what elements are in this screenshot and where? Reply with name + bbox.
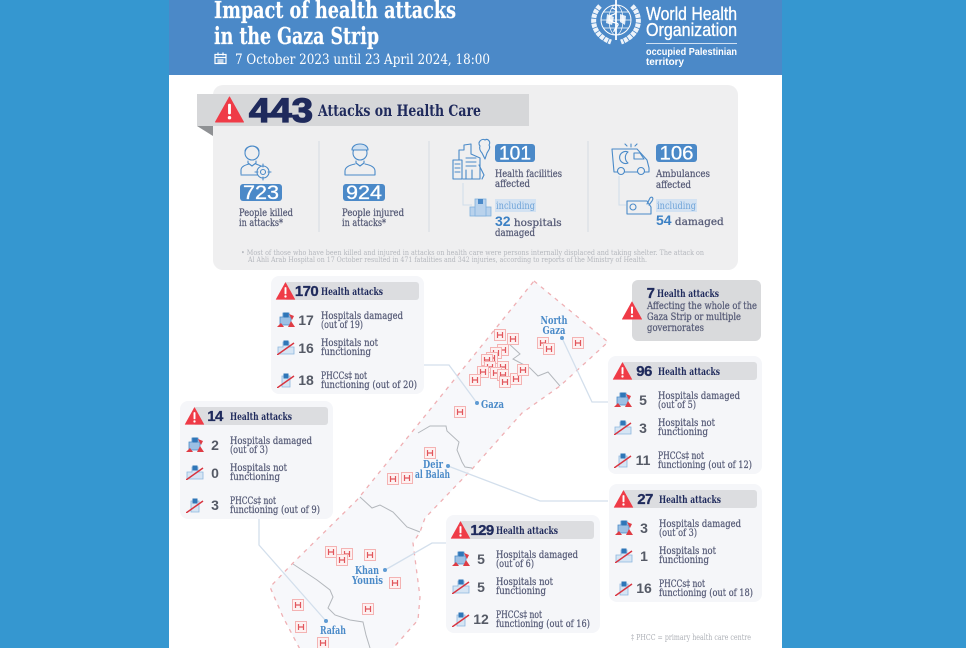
WHO logo: Organization <box>646 20 737 40</box>
stat: people killed <box>239 146 293 229</box>
panel: Rafah governorate: Health attacks <box>230 411 292 423</box>
panel: Rafah governorate: 3 <box>211 497 219 513</box>
panel: Rafah governorate <box>180 401 333 519</box>
panel: North Gaza governorate: 3 <box>639 420 647 436</box>
stat: people injured: in attacks* <box>342 217 387 229</box>
panel: Khan Younis governorate <box>446 515 600 633</box>
stat: health facilities: damaged <box>495 227 535 239</box>
panel: Khan Younis governorate: (out of 6) <box>496 558 534 570</box>
panel: Gaza governorate: functioning (out of 20) <box>321 379 417 391</box>
white page <box>169 0 782 648</box>
footnote: • Most of those who have been killed and injured in attacks on health care were persons internally displaced and taking shelter. The attack on <box>241 248 704 257</box>
icon: warning <box>216 97 243 122</box>
divider line <box>319 141 588 232</box>
WHO logo <box>594 0 737 68</box>
icon: hospital <box>470 199 491 216</box>
panel: Deir al Balah governorate: 27 <box>637 491 653 508</box>
label: Khan Younis <box>351 564 387 587</box>
panel: North Gaza governorate <box>608 356 762 474</box>
callout: 7 health attacks: Gaza Strip or multiple <box>647 311 741 323</box>
panel: Rafah governorate: functioning <box>230 471 280 483</box>
panel: North Gaza governorate: 5 <box>639 392 647 408</box>
panel: Gaza governorate: functioning <box>321 346 371 358</box>
label: People injured <box>342 207 404 219</box>
panel: North Gaza governorate: Hospitals not <box>658 417 716 429</box>
panel: Gaza governorate: (out of 19) <box>321 319 363 331</box>
panel: Rafah governorate: PHCCs‡ not <box>230 495 277 507</box>
panel: North Gaza governorate: Hospitals damaged <box>658 390 740 402</box>
label: Rafah: Rafah <box>320 624 346 637</box>
panel: Gaza governorate: 170 <box>295 283 318 300</box>
badge 723 <box>240 184 282 201</box>
panel: Rafah governorate: 2 <box>211 437 219 453</box>
stat: health facilities: including <box>496 201 535 212</box>
label: Rafah <box>320 619 346 637</box>
panel: Deir al Balah governorate: 1 <box>640 548 648 564</box>
label: Khan Younis: Khan <box>355 564 379 577</box>
header band <box>169 0 782 75</box>
panel: attacks on health care summary <box>197 85 738 270</box>
callout: 7 health attacks: Affecting the whole of the <box>646 300 757 312</box>
WHO logo: territory <box>646 57 684 68</box>
panel: Deir al Balah governorate: 16 <box>636 580 652 596</box>
title <box>214 0 456 50</box>
panel: Khan Younis governorate: PHCCs‡ not <box>496 609 543 621</box>
panel: Rafah governorate: 14 <box>207 408 224 425</box>
callout: 7 health attacks: Health attacks <box>657 288 719 300</box>
panel: Khan Younis governorate: Hospitals not <box>496 576 554 588</box>
stat: health facilities: affected <box>495 178 530 190</box>
panel: Deir al Balah governorate <box>609 484 762 602</box>
label: Gaza <box>475 398 504 411</box>
panel: Deir al Balah governorate: 3 <box>640 520 648 536</box>
panel: North Gaza governorate: Health attacks <box>658 366 720 378</box>
label: Health facilities <box>495 168 562 180</box>
logo wordmark: World Health <box>646 4 737 24</box>
stat: ambulances: 106 <box>660 144 694 164</box>
panel: Khan Younis governorate: functioning <box>496 585 546 597</box>
panel: Rafah governorate: 0 <box>211 465 219 481</box>
hospitals damaged: 32 hospitals <box>495 213 562 229</box>
stat: people killed: 723 <box>243 183 279 204</box>
title: in the Gaza Strip <box>214 23 379 50</box>
stat: health facilities: 101 <box>499 144 531 164</box>
panel: Khan Younis governorate: Health attacks <box>496 525 558 537</box>
panel: Rafah governorate: functioning (out of 9) <box>230 504 320 516</box>
label: People killed <box>239 207 293 219</box>
strip outline <box>270 281 608 648</box>
panel: Gaza governorate: Hospitals not <box>321 337 379 349</box>
icon: person with target <box>241 146 271 180</box>
hospital markers <box>292 330 584 648</box>
panel: Gaza governorate: Health attacks <box>321 286 383 298</box>
panel: North Gaza governorate: 96 <box>636 363 652 380</box>
including highlight <box>495 199 536 212</box>
panel: Deir al Balah governorate: functioning (out of 18) <box>659 587 753 599</box>
ambulances damaged: 54 damaged <box>656 212 724 228</box>
label: Deir al Balah <box>415 458 450 481</box>
panel: Deir al Balah governorate: (out of 3) <box>659 527 697 539</box>
headline label: Attacks on Health Care <box>317 101 481 120</box>
date range: 7 October 2023 until 23 April 2024, 18:00 <box>235 52 490 68</box>
panel: Gaza governorate: PHCCs‡ not <box>321 370 368 382</box>
badge 101 <box>495 144 535 162</box>
footnote <box>241 248 704 264</box>
panel: Khan Younis governorate: 5 <box>477 551 485 567</box>
stat: people injured: 924 <box>346 183 382 204</box>
panel: Deir al Balah governorate: Hospitals damaged <box>659 518 741 530</box>
label: Deir al Balah: al Balah <box>415 468 450 481</box>
icon: injured person <box>345 144 375 175</box>
WHO logo: occupied Palestinian <box>646 47 737 58</box>
panel: Rafah governorate: Hospitals not <box>230 462 288 474</box>
connector <box>619 176 626 205</box>
panel: Gaza governorate: 17 <box>298 312 314 328</box>
icon: WHO emblem <box>594 0 638 42</box>
including highlight <box>656 199 697 212</box>
panel: Gaza governorate: 18 <box>298 372 314 388</box>
callout: 7 health attacks: 7 <box>647 285 655 302</box>
PHCC footnote: ‡ PHCC = primary health care centre <box>631 633 751 642</box>
banner ribbon <box>197 92 529 136</box>
stat: people injured <box>342 144 404 229</box>
callout: 7 health attacks: governorates <box>647 322 704 334</box>
badge 924 <box>343 184 385 201</box>
label: Khan Younis: Younis <box>351 574 383 587</box>
icon: calendar <box>215 52 226 64</box>
panel: Gaza governorate: Hospitals damaged <box>321 310 403 322</box>
connector <box>463 183 472 205</box>
map: Gaza Strip <box>259 281 608 648</box>
panel: Khan Younis governorate: 129 <box>470 522 494 539</box>
stat: ambulances: including <box>657 201 696 212</box>
governorate borders <box>293 343 560 648</box>
panel: Gaza governorate <box>271 276 424 394</box>
callout: 7 health attacks <box>622 280 761 341</box>
stat: ambulances <box>612 144 724 228</box>
panel: Khan Younis governorate: Hospitals damaged <box>496 549 578 561</box>
stat: people killed: in attacks* <box>239 217 284 229</box>
panel: Deir al Balah governorate: Health attacks <box>659 494 721 506</box>
panel: Deir al Balah governorate: PHCCs‡ not <box>659 578 706 590</box>
panel: Deir al Balah governorate: Hospitals not <box>659 545 717 557</box>
label: North Gaza <box>540 314 568 340</box>
panel: Khan Younis governorate: 5 <box>477 579 485 595</box>
leader lines <box>259 338 608 621</box>
label: Gaza: Gaza <box>481 398 504 411</box>
headline number: 443 <box>249 92 313 130</box>
footnote: Al Ahli Arab Hospital on 17 October resulted in 471 fatalities and 342 injuries, according to reports of the Ministry of Health. <box>247 255 647 264</box>
panel: Deir al Balah governorate: functioning <box>659 554 709 566</box>
icon: warning <box>622 302 642 319</box>
panel: North Gaza governorate: functioning <box>658 426 708 438</box>
icon: ambulance <box>612 144 649 174</box>
panel: North Gaza governorate: functioning (out of 12) <box>658 459 752 471</box>
panel: Gaza governorate: 16 <box>298 340 314 356</box>
badge 106 <box>656 144 697 162</box>
panel: North Gaza governorate: 11 <box>636 452 651 468</box>
label: North Gaza: Gaza <box>542 324 566 337</box>
label: North Gaza: North <box>540 314 568 327</box>
stat: health facilities <box>453 139 562 239</box>
label: Ambulances <box>655 168 710 180</box>
panel: Rafah governorate: Hospitals damaged <box>230 435 312 447</box>
panel: Khan Younis governorate: functioning (out of 16) <box>496 618 590 630</box>
panel: North Gaza governorate: (out of 5) <box>658 399 696 411</box>
panel: Rafah governorate: (out of 3) <box>230 444 268 456</box>
label: Deir al Balah: Deir <box>423 458 443 471</box>
stat: ambulances: affected <box>656 179 691 191</box>
icon: damaged building <box>453 139 490 179</box>
panel: North Gaza governorate: PHCCs‡ not <box>658 450 705 462</box>
icon: damaged ambulance <box>627 197 653 214</box>
panel: Khan Younis governorate: 12 <box>473 611 489 627</box>
